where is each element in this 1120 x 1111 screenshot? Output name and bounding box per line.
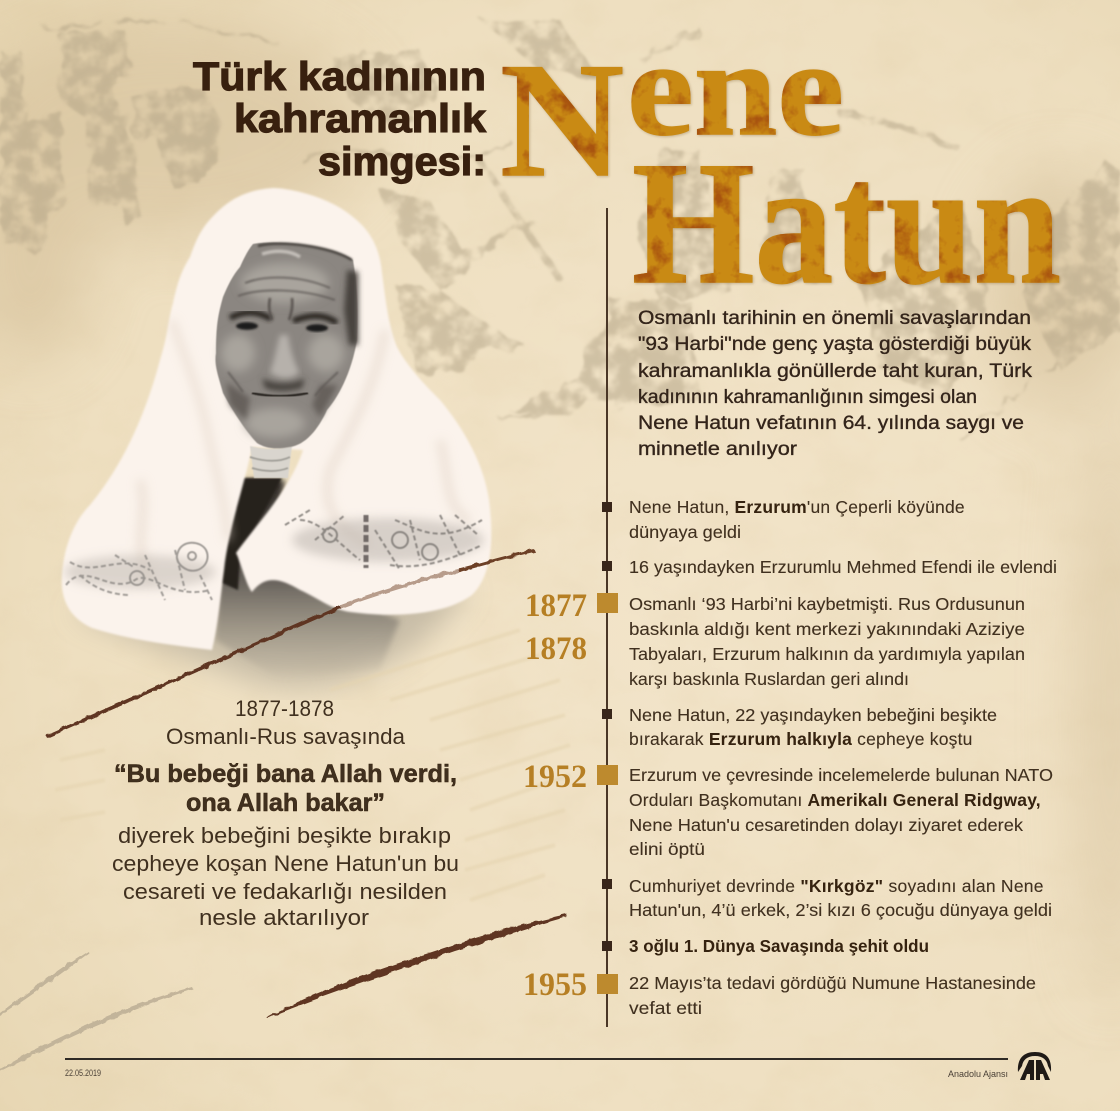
timeline entries: baskınla aldığı kent merkezi yakınındaki Aziziye — [629, 619, 1025, 639]
timeline entries: dünyaya geldi — [629, 522, 741, 542]
timeline entries: Nene Hatun'u cesaretinden dolayı ziyaret ederek — [629, 815, 1023, 835]
timeline entries: bırakarak Erzurum halkıyla cepheye koştu — [629, 729, 973, 749]
brush stroke lower — [266, 914, 567, 1018]
heading: Nene Hatun — [500, 14, 1061, 321]
left text block: quote: nesle aktarılıyor — [199, 905, 369, 930]
timeline axis — [606, 208, 608, 1027]
date: 22.05.2019 — [65, 1068, 101, 1078]
heading: Nene Hatun: N — [500, 30, 624, 211]
footer — [65, 1052, 1051, 1080]
year labels: 1878 — [525, 631, 587, 667]
intro paragraph: Osmanlı tarihinin en önemli savaşlarından — [638, 307, 1031, 329]
intro paragraph: kahramanlıkla gönüllerde taht kuran, Türk — [638, 360, 1032, 382]
icon: Anadolu Ajansı logo — [1018, 1052, 1051, 1080]
portrait of Nene Hatun — [62, 188, 491, 687]
intro paragraph: "93 Harbi"nde genç yaşta gösterdiği büyük — [638, 333, 1031, 355]
white scarf left panel and hood — [62, 188, 491, 650]
left text block: quote — [112, 696, 459, 930]
year markers — [597, 593, 618, 994]
heading: Nene Hatun: ene — [627, 14, 844, 164]
quote: “Bu bebeği bana Allah verdi, — [114, 760, 457, 788]
quote — [114, 760, 457, 817]
timeline entries — [629, 497, 1057, 1018]
heading: Türk kadınının kahramanlık simgesi: kahramanlık — [234, 97, 487, 141]
facial features — [221, 244, 358, 438]
timeline entries: Erzurum ve çevresinde incelemelerde bulunan NATO — [629, 765, 1053, 785]
quote: ona Allah bakar” — [186, 789, 385, 817]
year labels — [523, 588, 587, 1003]
timeline entries: 22 Mayıs’ta tedavi gördüğü Numune Hastanesinde — [629, 973, 1036, 993]
left text block: quote: cepheye koşan Nene Hatun'un bu — [112, 851, 459, 876]
faint grey brush strokes — [0, 951, 193, 1072]
timeline entries: Orduları Başkomutanı Amerikalı General Ridgway, — [629, 790, 1041, 810]
lower dress fading into paper — [70, 560, 470, 687]
embroidery left — [64, 543, 216, 600]
timeline entries: karşı baskınla Ruslardan geri alındı — [629, 669, 909, 689]
source: Anadolu Ajansı — [948, 1069, 1008, 1080]
heading: Türk kadınının kahramanlık simgesi: Türk kadınının — [193, 55, 486, 99]
left text block: quote: diyerek bebeğini beşikte bırakıp — [118, 823, 451, 848]
intro paragraph: minnetle anılıyor — [638, 438, 798, 460]
heading: Türk kadınının kahramanlık simgesi — [193, 55, 487, 184]
left text block: quote: cesareti ve fedakarlığı nesilden — [123, 879, 447, 904]
timeline entries: 16 yaşındayken Erzurumlu Mehmed Efendi ile evlendi — [629, 557, 1057, 577]
timeline entries: Tabyaları, Erzurum halkının da yardımıyla yapılan — [629, 644, 1025, 664]
intro paragraph: kadınının kahramanlığının simgesi olan — [638, 386, 977, 408]
brush stroke across portrait — [48, 551, 533, 736]
embroidery right — [285, 510, 484, 570]
timeline — [523, 208, 1057, 1027]
faint hatch texture behind text — [55, 630, 570, 900]
timeline entries: Nene Hatun, 22 yaşındayken bebeğini beşikte — [629, 705, 997, 725]
year labels: 1877 — [525, 588, 587, 624]
timeline entries: Osmanlı ‘93 Harbi’ni kaybetmişti. Rus Ordusunun — [629, 594, 1025, 614]
face — [215, 243, 358, 448]
heading: Türk kadınının kahramanlık simgesi: simgesi: — [318, 140, 486, 184]
collar — [250, 446, 292, 478]
faded battle sketch in background — [0, 20, 1120, 440]
year labels: 1952 — [523, 759, 587, 795]
intro paragraph: Nene Hatun vefatının 64. yılında saygı ve — [638, 412, 1024, 434]
timeline entries: 3 oğlu 1. Dünya Savaşında şehit oldu — [629, 936, 929, 956]
timeline entries: Cumhuriyet devrinde "Kırkgöz" soyadını alan Nene — [629, 876, 1044, 896]
timeline entries: Nene Hatun, Erzurum'un Çeperli köyünde — [629, 497, 965, 517]
timeline entries: elini öptü — [629, 839, 705, 859]
intro paragraph — [638, 307, 1032, 460]
year labels: 1955 — [523, 967, 587, 1003]
left text block: quote: 1877-1878 — [235, 696, 334, 721]
timeline markers — [602, 502, 612, 951]
dark blouse and skirt — [215, 480, 400, 680]
timeline entries: Hatun'un, 4’ü erkek, 2’si kızı 6 çocuğu dünyaya geldi — [629, 900, 1052, 920]
scarf fold shadows — [140, 320, 470, 580]
left text block: quote: Osmanlı-Rus savaşında — [166, 724, 406, 749]
timeline entries: vefat etti — [629, 998, 702, 1018]
heading: Nene Hatun: Hatun — [632, 126, 1061, 321]
